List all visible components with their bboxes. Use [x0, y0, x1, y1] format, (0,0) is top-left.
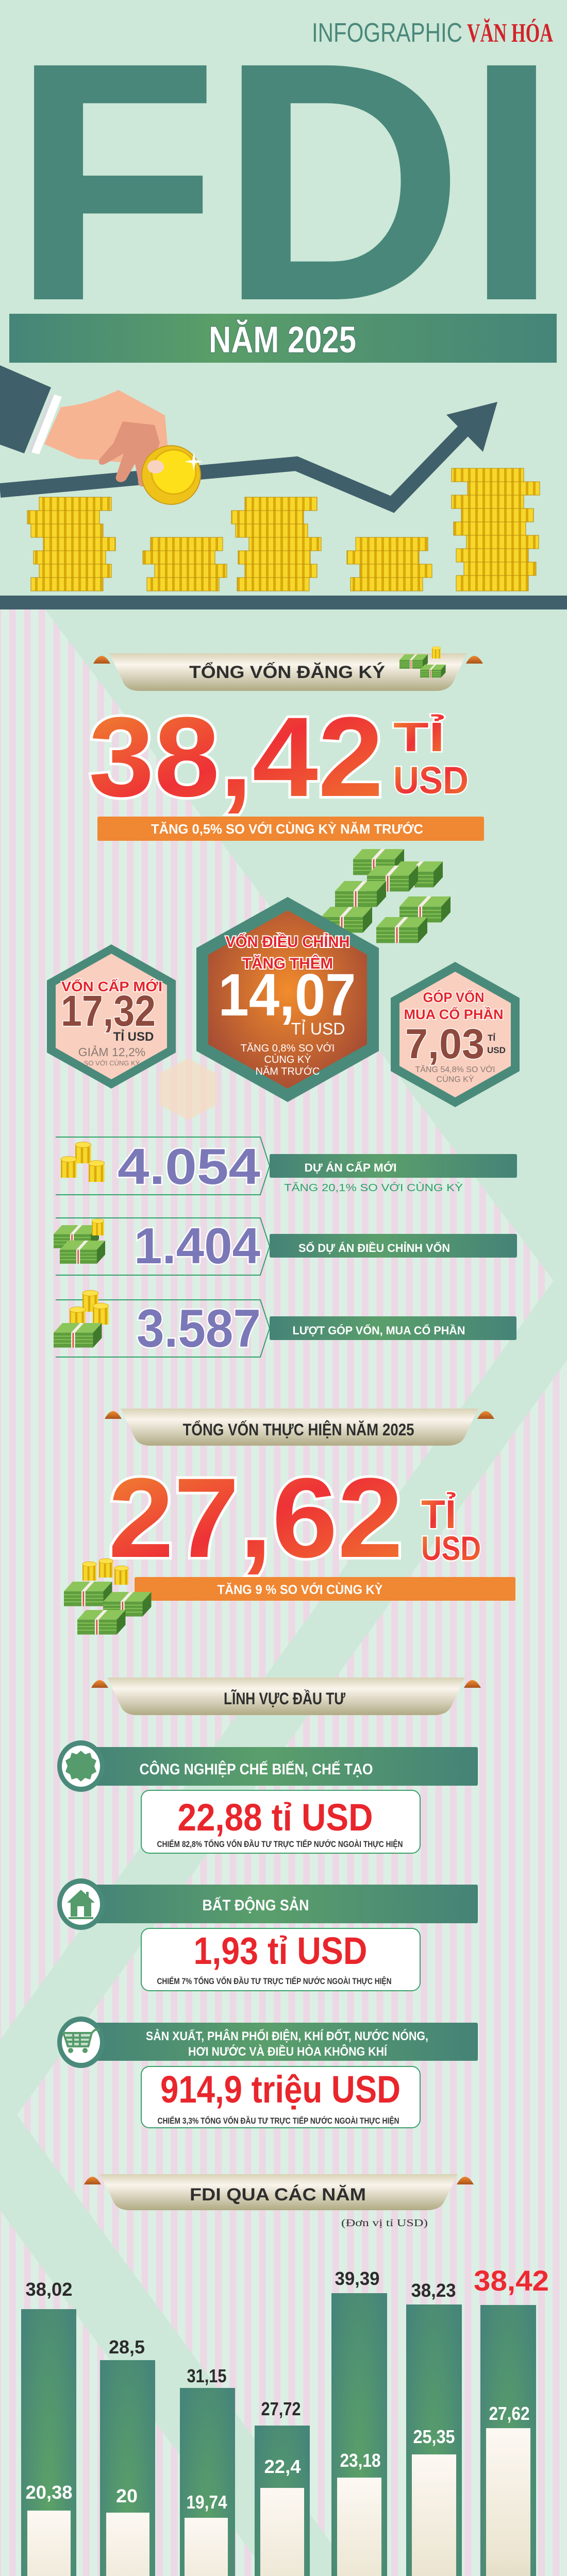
bar group 2024 — [406, 2280, 462, 2576]
banner: TỔNG VỐN THỰC HIỆN NĂM 2025 — [105, 1409, 494, 1446]
big number 38,42 tỉ USD: TỈ — [393, 714, 445, 760]
hexagon: vốn cấp mới: TỈ USD — [113, 1029, 154, 1044]
stat row: 4.054 dự án cấp mới: DỰ ÁN CẤP MỚI — [304, 1161, 397, 1174]
big number 38,42 tỉ USD: 38,42 — [89, 693, 383, 820]
hexagon: vốn điều chỉnh — [196, 897, 379, 1102]
hexagon: vốn cấp mới: 17,32 — [61, 987, 156, 1035]
bar group 2020: 20 — [116, 2485, 138, 2506]
big number 27,62 tỉ USD: USD — [421, 1529, 481, 1567]
hexagon: vốn cấp mới: SO VỚI CÙNG KỲ — [84, 1059, 140, 1067]
icon: money and coins — [64, 1558, 152, 1635]
hexagon: vốn điều chỉnh: NĂM TRƯỚC — [256, 1065, 320, 1077]
hexagon: góp vốn mua cổ phần: CÙNG KỲ — [437, 1074, 474, 1084]
sector 1: công nghiệp chế biến: CÔNG NGHIỆP CHẾ BIẾN, CHẾ TẠO — [139, 1760, 373, 1778]
sector 3: điện, khí đốt: 914,9 triệu USD — [160, 2068, 401, 2111]
stat row: 4.054 dự án cấp mới: TĂNG 20,1% SO VỚI CÙNG KỲ — [284, 1182, 463, 1194]
background top — [0, 0, 567, 598]
hexagon: vốn cấp mới — [47, 944, 176, 1089]
hexagon: góp vốn mua cổ phần: TỈ — [488, 1033, 495, 1043]
subtitle band: NĂM 2025 — [9, 314, 557, 363]
stat row: 3.587 lượt góp vốn: 3.587 — [137, 1299, 261, 1359]
sector 2: bất động sản: CHIẾM 7% TỔNG VỐN ĐẦU TƯ TRỰC TIẾP NƯỚC NGOÀI THỰC HIỆN — [157, 1976, 392, 1986]
banner: FDI QUA CÁC NĂM — [84, 2174, 474, 2210]
sector 1: công nghiệp chế biến: CHIẾM 82,8% TỔNG VỐN ĐẦU TƯ TRỰC TIẾP NƯỚC NGOÀI THỰC HIỆN — [157, 1839, 403, 1849]
bar group 2020 — [100, 2336, 155, 2576]
orange bar: tăng 9%: TĂNG 9 % SO VỚI CÙNG KỲ — [218, 1582, 383, 1597]
sector 3: điện, khí đốt: CHIẾM 3,3% TỔNG VỐN ĐẦU TƯ TRỰC TIẾP NƯỚC NGOÀI THỰC HIỆN — [158, 2115, 399, 2126]
icon: money stacks — [321, 849, 451, 943]
banner: TỔNG VỐN ĐĂNG KÝ — [93, 647, 483, 691]
bar group 2021: 19,74 — [187, 2492, 227, 2513]
bar group 2024: 25,35 — [413, 2426, 455, 2447]
title FDI: FDI — [11, 0, 559, 371]
subtitle band: NĂM 2025: NĂM 2025 — [209, 319, 356, 361]
stat row: 1.404 dự án điều chỉnh: SỐ DỰ ÁN ĐIỀU CHỈNH VỐN — [298, 1241, 450, 1255]
hexagon: góp vốn mua cổ phần: USD — [487, 1045, 506, 1055]
banner: LĨNH VỰC ĐẦU TƯ: LĨNH VỰC ĐẦU TƯ — [224, 1689, 345, 1708]
illustration: growth arrow — [0, 402, 497, 504]
hexagon: vốn điều chỉnh: 14,07 — [219, 961, 356, 1028]
orange bar: tăng 9% — [135, 1577, 515, 1601]
bar group 2022: 27,72 — [261, 2398, 301, 2419]
big number 27,62 tỉ USD: TỈ — [421, 1492, 456, 1537]
banner: TỔNG VỐN ĐĂNG KÝ: TỔNG VỐN ĐĂNG KÝ — [189, 662, 385, 682]
illustration: hand with coin — [0, 365, 203, 504]
sector 2: bất động sản: BẤT ĐỘNG SẢN — [202, 1896, 309, 1914]
chart unit note: (Đơn vị tỉ USD) — [341, 2217, 428, 2229]
banner: TỔNG VỐN THỰC HIỆN NĂM 2025: TỔNG VỐN THỰC HIỆN NĂM 2025 — [182, 1420, 414, 1439]
bar chart: FDI 2019-2025 — [21, 2264, 549, 2576]
hexagon: vốn điều chỉnh: TĂNG THÊM — [242, 955, 333, 972]
hexagon: vốn cấp mới: VỐN CẤP MỚI — [61, 978, 162, 994]
orange bar: tăng 0,5% — [97, 817, 484, 841]
stat row: 1.404 dự án điều chỉnh: 1.404 — [134, 1217, 260, 1274]
stat row: 4.054 dự án cấp mới — [56, 1137, 517, 1195]
bar group 2025 — [474, 2264, 549, 2576]
hexagon: vốn điều chỉnh: VỐN ĐIỀU CHỈNH — [226, 933, 349, 951]
sector 3: điện, khí đốt — [57, 2016, 478, 2128]
bar group 2019 — [21, 2279, 76, 2576]
stat row: 1.404 dự án điều chỉnh — [54, 1217, 517, 1275]
banner: FDI QUA CÁC NĂM: FDI QUA CÁC NĂM — [190, 2185, 366, 2205]
dark divider band — [0, 596, 567, 609]
banner: LĨNH VỰC ĐẦU TƯ — [91, 1677, 481, 1715]
bar group 2025: 27,62 — [489, 2403, 530, 2424]
hexagon: góp vốn mua cổ phần: 7,03 — [405, 1021, 485, 1067]
bar group 2021: 31,15 — [187, 2365, 227, 2386]
hexagon: vốn điều chỉnh: TỈ USD — [291, 1020, 345, 1038]
bar group 2023 — [331, 2268, 387, 2576]
hexagon: góp vốn mua cổ phần: TĂNG 54,8% SO VỚI — [415, 1064, 495, 1074]
hexagon: góp vốn mua cổ phần — [391, 962, 520, 1107]
bar group 2024: 38,23 — [411, 2280, 456, 2301]
header logo: INFOGRAPHIC — [312, 18, 462, 48]
big number 27,62 tỉ USD: 27,62 — [108, 1454, 403, 1581]
bar group 2022 — [255, 2398, 310, 2576]
bar group 2019: 20,38 — [26, 2482, 72, 2503]
background stripes — [0, 598, 567, 2576]
hexagon: góp vốn mua cổ phần: GÓP VỐN — [423, 989, 485, 1005]
bar group 2023: 23,18 — [340, 2450, 380, 2471]
sector 2: bất động sản: 1,93 tỉ USD — [194, 1929, 367, 1972]
hexagon: vốn điều chỉnh: TĂNG 0,8% SO VỚI — [241, 1042, 335, 1054]
bar group 2019: 38,02 — [26, 2279, 72, 2300]
sector 1: công nghiệp chế biến — [57, 1740, 478, 1853]
bar group 2025: 38,42 — [474, 2264, 549, 2297]
stat row: 3.587 lượt góp vốn: LƯỢT GÓP VỐN, MUA CỔ PHẦN — [293, 1324, 465, 1337]
sector 2: bất động sản — [57, 1878, 478, 1991]
hexagon: vốn điều chỉnh: CÙNG KỲ — [264, 1054, 311, 1065]
sector 3: điện, khí đốt: HƠI NƯỚC VÀ ĐIỀU HÒA KHÔNG KHÍ — [188, 2044, 388, 2059]
orange bar: tăng 0,5%: TĂNG 0,5% SO VỚI CÙNG KỲ NĂM TRƯỚC — [151, 821, 423, 837]
stat row: 4.054 dự án cấp mới: 4.054 — [118, 1138, 260, 1195]
decorative faint hexagon — [159, 1058, 217, 1120]
bar group 2020: 28,5 — [109, 2336, 145, 2358]
sector 1: công nghiệp chế biến: 22,88 tỉ USD — [177, 1796, 373, 1839]
stat row: 3.587 lượt góp vốn — [54, 1291, 516, 1359]
hexagon: góp vốn mua cổ phần: MUA CỔ PHẦN — [404, 1006, 503, 1022]
bar group 2023: 39,39 — [335, 2268, 379, 2289]
bar group 2022: 22,4 — [264, 2456, 301, 2477]
sector 3: điện, khí đốt: SẢN XUẤT, PHÂN PHỐI ĐIỆN, KHÍ ĐỐT, NƯỚC NÓNG, — [146, 2028, 428, 2043]
big number 38,42 tỉ USD: USD — [393, 759, 469, 802]
bar group 2021 — [180, 2365, 235, 2576]
illustration: coin stacks — [27, 468, 540, 591]
hexagon: vốn cấp mới: GIẢM 12,2% — [78, 1044, 145, 1059]
